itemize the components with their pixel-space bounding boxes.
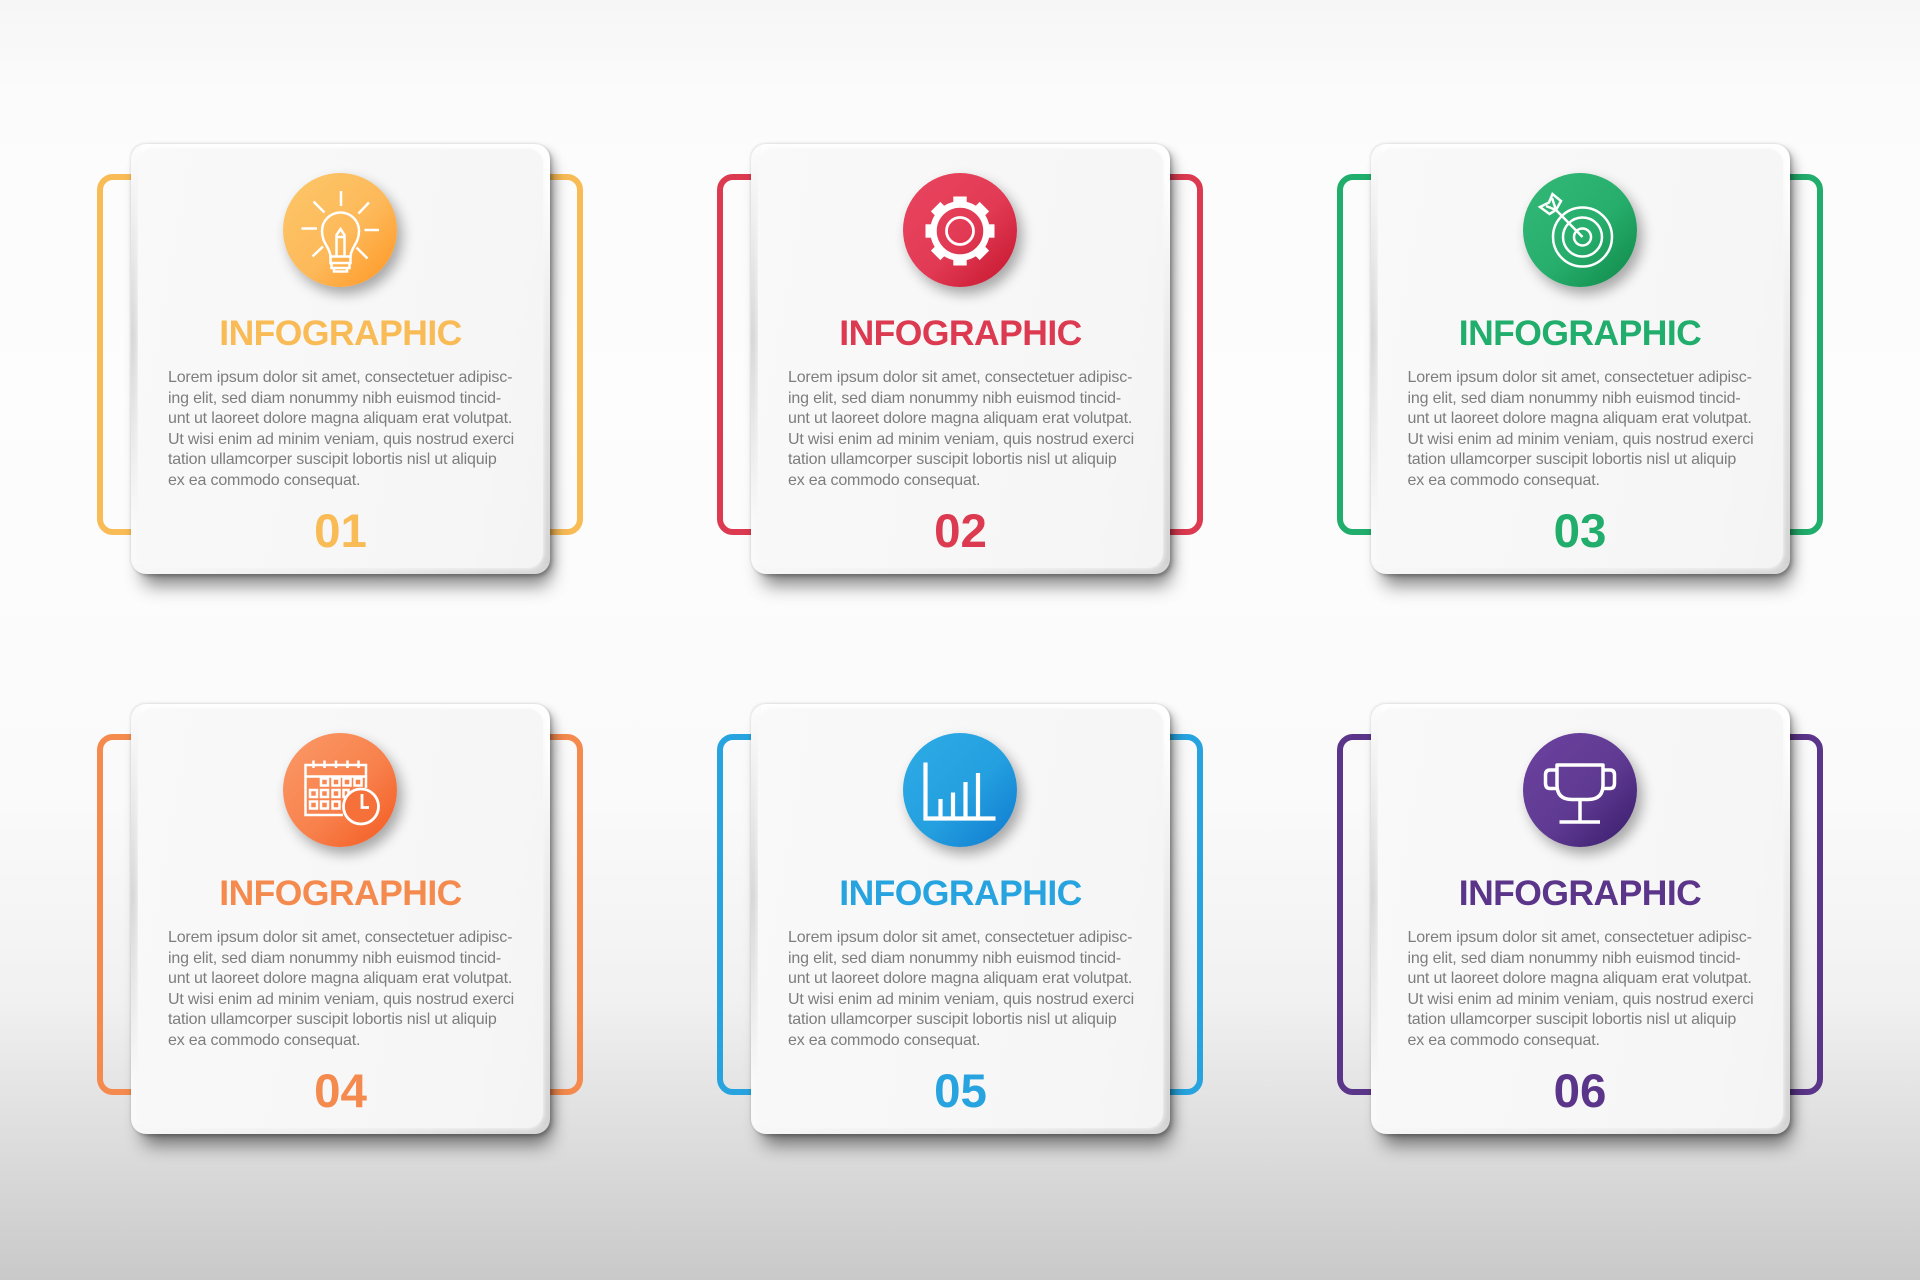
text block 03: Lorem ipsum dolor sit amet, consectetuer adipisc- bbox=[1408, 369, 1752, 386]
text block 01: ex ea commodo consequat. bbox=[168, 472, 360, 489]
card 02 bbox=[751, 144, 1170, 574]
text block 06: ing elit, sed diam nonummy nibh euismod tincid- bbox=[1408, 950, 1741, 967]
panel: step 01 bbox=[97, 142, 583, 598]
text block 03: tation ullamcorper suscipit lobortis nisl ut aliquip bbox=[1408, 451, 1736, 468]
text block 02: Ut wisi enim ad minim veniam, quis nostrud exerci bbox=[788, 431, 1134, 448]
text block 05: ing elit, sed diam nonummy nibh euismod tincid- bbox=[788, 950, 1121, 967]
number 04: 04 bbox=[314, 1065, 367, 1118]
icon circle 03 bbox=[1522, 173, 1636, 287]
text block 05: Ut wisi enim ad minim veniam, quis nostrud exerci bbox=[788, 991, 1134, 1008]
bracket frame 05 bbox=[717, 734, 1203, 1095]
heading 05: INFOGRAPHIC bbox=[839, 873, 1082, 913]
icon circle 04 bbox=[283, 733, 397, 847]
text block 05: Lorem ipsum dolor sit amet, consectetuer adipisc- bbox=[788, 929, 1132, 946]
text block 04: tation ullamcorper suscipit lobortis nisl ut aliquip bbox=[168, 1011, 497, 1028]
bracket frame 01 bbox=[97, 174, 583, 535]
icon: calendar with clock bbox=[304, 760, 380, 826]
text block 04: Ut wisi enim ad minim veniam, quis nostrud exerci bbox=[168, 991, 514, 1008]
text block 02: ing elit, sed diam nonummy nibh euismod tincid- bbox=[788, 390, 1121, 407]
text block 01: tation ullamcorper suscipit lobortis nisl ut aliquip bbox=[168, 451, 497, 468]
text block 03 bbox=[1408, 369, 1753, 489]
bracket frame 06 bbox=[1336, 734, 1822, 1095]
text block 03: ing elit, sed diam nonummy nibh euismod tincid- bbox=[1408, 390, 1741, 407]
card face 04 bbox=[138, 709, 543, 1128]
card face 03 bbox=[1378, 149, 1782, 568]
panel: step 02 bbox=[717, 142, 1203, 598]
heading 04: INFOGRAPHIC bbox=[219, 873, 462, 913]
text block 02: ex ea commodo consequat. bbox=[788, 472, 980, 489]
text block 05: ex ea commodo consequat. bbox=[788, 1032, 980, 1049]
icon: target with arrow bbox=[1538, 192, 1614, 268]
text block 03: unt ut laoreet dolore magna aliquam erat volutpat. bbox=[1408, 410, 1752, 427]
text block 06: unt ut laoreet dolore magna aliquam erat volutpat. bbox=[1408, 970, 1752, 987]
card face 02 bbox=[758, 149, 1163, 568]
icon circle 06 bbox=[1522, 733, 1636, 847]
text block 04: Lorem ipsum dolor sit amet, consectetuer adipisc- bbox=[168, 929, 512, 946]
number 05: 05 bbox=[934, 1065, 987, 1118]
card 06 bbox=[1370, 704, 1790, 1134]
text block 02: tation ullamcorper suscipit lobortis nisl ut aliquip bbox=[788, 451, 1117, 468]
number 02: 02 bbox=[934, 505, 987, 558]
icon: trophy bbox=[1544, 763, 1616, 824]
text block 03: ex ea commodo consequat. bbox=[1408, 472, 1600, 489]
text block 06: ex ea commodo consequat. bbox=[1408, 1032, 1600, 1049]
number 01: 01 bbox=[314, 505, 367, 558]
text block 04: ing elit, sed diam nonummy nibh euismod tincid- bbox=[168, 950, 501, 967]
text block 04: ex ea commodo consequat. bbox=[168, 1032, 360, 1049]
panel: step 06 bbox=[1337, 702, 1823, 1158]
bracket frame 04 bbox=[97, 734, 583, 1095]
text block 02 bbox=[788, 369, 1134, 489]
heading 01: INFOGRAPHIC bbox=[219, 313, 462, 353]
text block 02: unt ut laoreet dolore magna aliquam erat volutpat. bbox=[788, 410, 1132, 427]
bracket frame 03 bbox=[1336, 174, 1822, 535]
text block 04 bbox=[168, 929, 514, 1049]
text block 01: unt ut laoreet dolore magna aliquam erat volutpat. bbox=[168, 410, 512, 427]
text block 03: Ut wisi enim ad minim veniam, quis nostrud exerci bbox=[1408, 431, 1753, 448]
text block 01: Lorem ipsum dolor sit amet, consectetuer adipisc- bbox=[168, 369, 512, 386]
card 03 bbox=[1370, 144, 1790, 574]
panel: step 03 bbox=[1337, 142, 1823, 598]
card face 01 bbox=[138, 149, 543, 568]
text block 06: Ut wisi enim ad minim veniam, quis nostrud exerci bbox=[1408, 991, 1753, 1008]
heading 02: INFOGRAPHIC bbox=[839, 313, 1082, 353]
text block 06: tation ullamcorper suscipit lobortis nisl ut aliquip bbox=[1408, 1011, 1736, 1028]
text block 02: Lorem ipsum dolor sit amet, consectetuer adipisc- bbox=[788, 369, 1132, 386]
icon circle 02 bbox=[903, 173, 1017, 287]
icon: light bulb bbox=[302, 191, 379, 273]
icon circle 05 bbox=[903, 733, 1017, 847]
icon: bar chart bbox=[923, 762, 996, 821]
number 03: 03 bbox=[1554, 505, 1606, 558]
icon: gear bbox=[926, 196, 994, 266]
card face 06 bbox=[1378, 709, 1782, 1128]
card 04 bbox=[131, 704, 550, 1134]
card face 05 bbox=[758, 709, 1163, 1128]
icon circle 01 bbox=[283, 173, 397, 287]
card 05 bbox=[751, 704, 1170, 1134]
text block 05: unt ut laoreet dolore magna aliquam erat volutpat. bbox=[788, 970, 1132, 987]
text block 06 bbox=[1408, 929, 1753, 1049]
text block 01: ing elit, sed diam nonummy nibh euismod tincid- bbox=[168, 390, 501, 407]
bracket frame 02 bbox=[717, 174, 1203, 535]
text block 05 bbox=[788, 929, 1134, 1049]
panel: step 04 bbox=[97, 702, 583, 1158]
text block 01 bbox=[168, 369, 514, 489]
text block 05: tation ullamcorper suscipit lobortis nisl ut aliquip bbox=[788, 1011, 1117, 1028]
heading 03: INFOGRAPHIC bbox=[1459, 313, 1701, 353]
text block 01: Ut wisi enim ad minim veniam, quis nostrud exerci bbox=[168, 431, 514, 448]
card 01 bbox=[131, 144, 550, 574]
number 06: 06 bbox=[1554, 1065, 1606, 1118]
text block 04: unt ut laoreet dolore magna aliquam erat volutpat. bbox=[168, 970, 512, 987]
heading 06: INFOGRAPHIC bbox=[1459, 873, 1701, 913]
text block 06: Lorem ipsum dolor sit amet, consectetuer adipisc- bbox=[1408, 929, 1752, 946]
panel: step 05 bbox=[717, 702, 1203, 1158]
